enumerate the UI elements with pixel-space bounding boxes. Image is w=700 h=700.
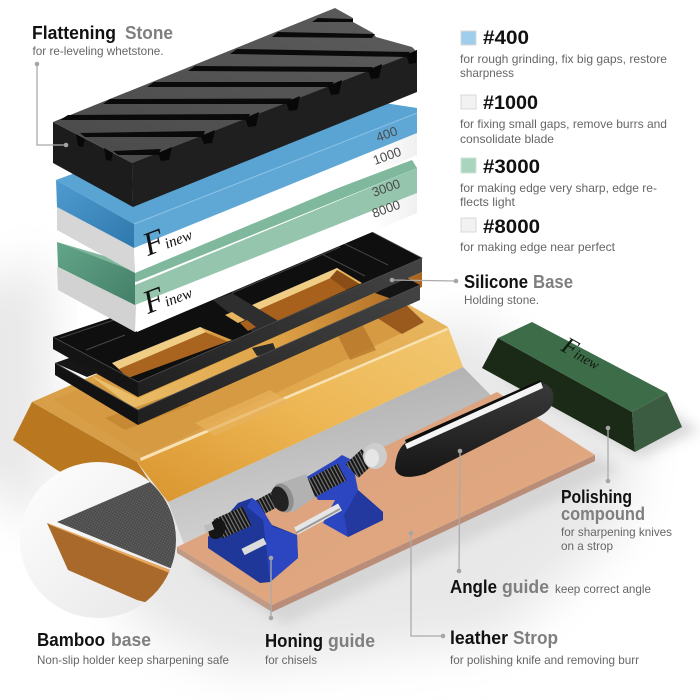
heading: silicone base: [464, 272, 573, 307]
brand mark: Finew: [137, 212, 196, 264]
heading: polishing compound: for sharpening knives: [561, 525, 672, 539]
legend: #8000: #8000: [483, 217, 540, 238]
heading: leather strop: Strop: [513, 628, 558, 648]
panel: leather strop: [177, 392, 620, 625]
heading: silicone base: Holding stone.: [464, 293, 539, 307]
heading: silicone base: Silicone: [464, 272, 528, 292]
front block base: [208, 498, 298, 583]
heading: bamboo base: base: [111, 630, 151, 650]
notches: [76, 50, 417, 161]
heading: flattening stone: Flattening: [32, 23, 116, 43]
callout line: honing guide: [269, 556, 273, 620]
heading: bamboo base: Non-slip holder keep sharpening safe: [37, 653, 229, 667]
icon: angle guide: [395, 380, 554, 477]
legend: #8000: [460, 217, 616, 254]
back block: [305, 455, 383, 537]
threaded screw, front: [255, 490, 292, 510]
panel: bamboo base: [13, 267, 530, 560]
knurled knob: [363, 443, 387, 469]
legend: #400: #400: [483, 28, 529, 49]
panel: bamboo base detail magnifier: [20, 462, 185, 618]
threaded screw, rear: [352, 456, 368, 471]
grooves: [60, 18, 410, 155]
callout line: polishing compound: [606, 426, 610, 483]
heading: honing guide: guide: [328, 631, 375, 651]
heading: polishing compound: Polishing: [561, 487, 632, 507]
legend: #400: sharpness: [460, 66, 514, 80]
heading: polishing compound: compound: [561, 504, 645, 524]
callout line: flattening stone: [35, 62, 68, 147]
heading: flattening stone: for re-leveling whetstone.: [32, 44, 164, 58]
heading: angle guide: keep correct angle: [555, 582, 651, 596]
panel: silicone base, upper frame: [53, 232, 422, 397]
heading: honing guide: Honing: [265, 631, 323, 651]
heading: leather strop: [450, 628, 639, 667]
legend: #1000: #1000: [483, 93, 538, 114]
panel: polishing compound: [482, 322, 700, 458]
legend: #400: for rough grinding, fix big gaps, restore: [460, 52, 667, 66]
steel pins: [243, 541, 265, 552]
heading: silicone base: Base: [533, 272, 573, 292]
heading: leather strop: leather: [450, 628, 508, 648]
icon: honing guide: [205, 443, 387, 583]
heading: honing guide: [265, 631, 375, 667]
callout line: silicone base: [390, 278, 458, 283]
heading: leather strop: for polishing knife and removing burr: [450, 653, 639, 667]
heading: bamboo base: Bamboo: [37, 630, 105, 650]
legend: #3000: [460, 157, 657, 209]
legend: #1000: [460, 93, 667, 146]
cavity seen through the frames: [112, 330, 236, 386]
heading: flattening stone: Stone: [125, 23, 173, 43]
heading: polishing compound: [561, 487, 672, 553]
legend: #3000: flects light: [460, 195, 516, 209]
heading: flattening stone: [32, 23, 173, 58]
panel: blue and white 400/1000 stone: [56, 90, 417, 273]
legend: #3000: #3000: [483, 157, 540, 178]
grit label: 400: 400: [374, 123, 399, 145]
callout line: angle guide: [457, 449, 462, 573]
legend: #400: [460, 28, 667, 80]
brand mark: Finew: [556, 332, 606, 376]
heading: polishing compound: on a strop: [561, 539, 613, 553]
heading: angle guide: [450, 577, 651, 597]
heading: honing guide: for chisels: [265, 653, 317, 667]
legend: #3000: for making edge very sharp, edge re-: [460, 181, 657, 195]
panel: flattening stone: [53, 8, 417, 207]
steel rod: [296, 507, 340, 531]
grit label: 1000: 1000: [371, 144, 403, 168]
heading: angle guide: Angle: [450, 577, 497, 597]
panel: silicone base, lower frame: [55, 277, 420, 425]
panel: green and white 3000/8000 stone: [57, 160, 417, 332]
heading: bamboo base: [37, 630, 229, 667]
legend: #1000: for fixing small gaps, remove burrs and: [460, 117, 667, 131]
legend: #1000: consolidate blade: [460, 132, 554, 146]
front block upright: [247, 498, 298, 582]
grit label: 3000: 3000: [370, 176, 402, 200]
callout line: leather strop: [409, 531, 445, 638]
brand mark: Finew: [137, 270, 196, 322]
legend: #8000: for making edge near perfect: [460, 240, 616, 254]
silver nut: [278, 474, 315, 513]
grit label: 8000: 8000: [370, 197, 402, 221]
heading: angle guide: guide: [502, 577, 549, 597]
